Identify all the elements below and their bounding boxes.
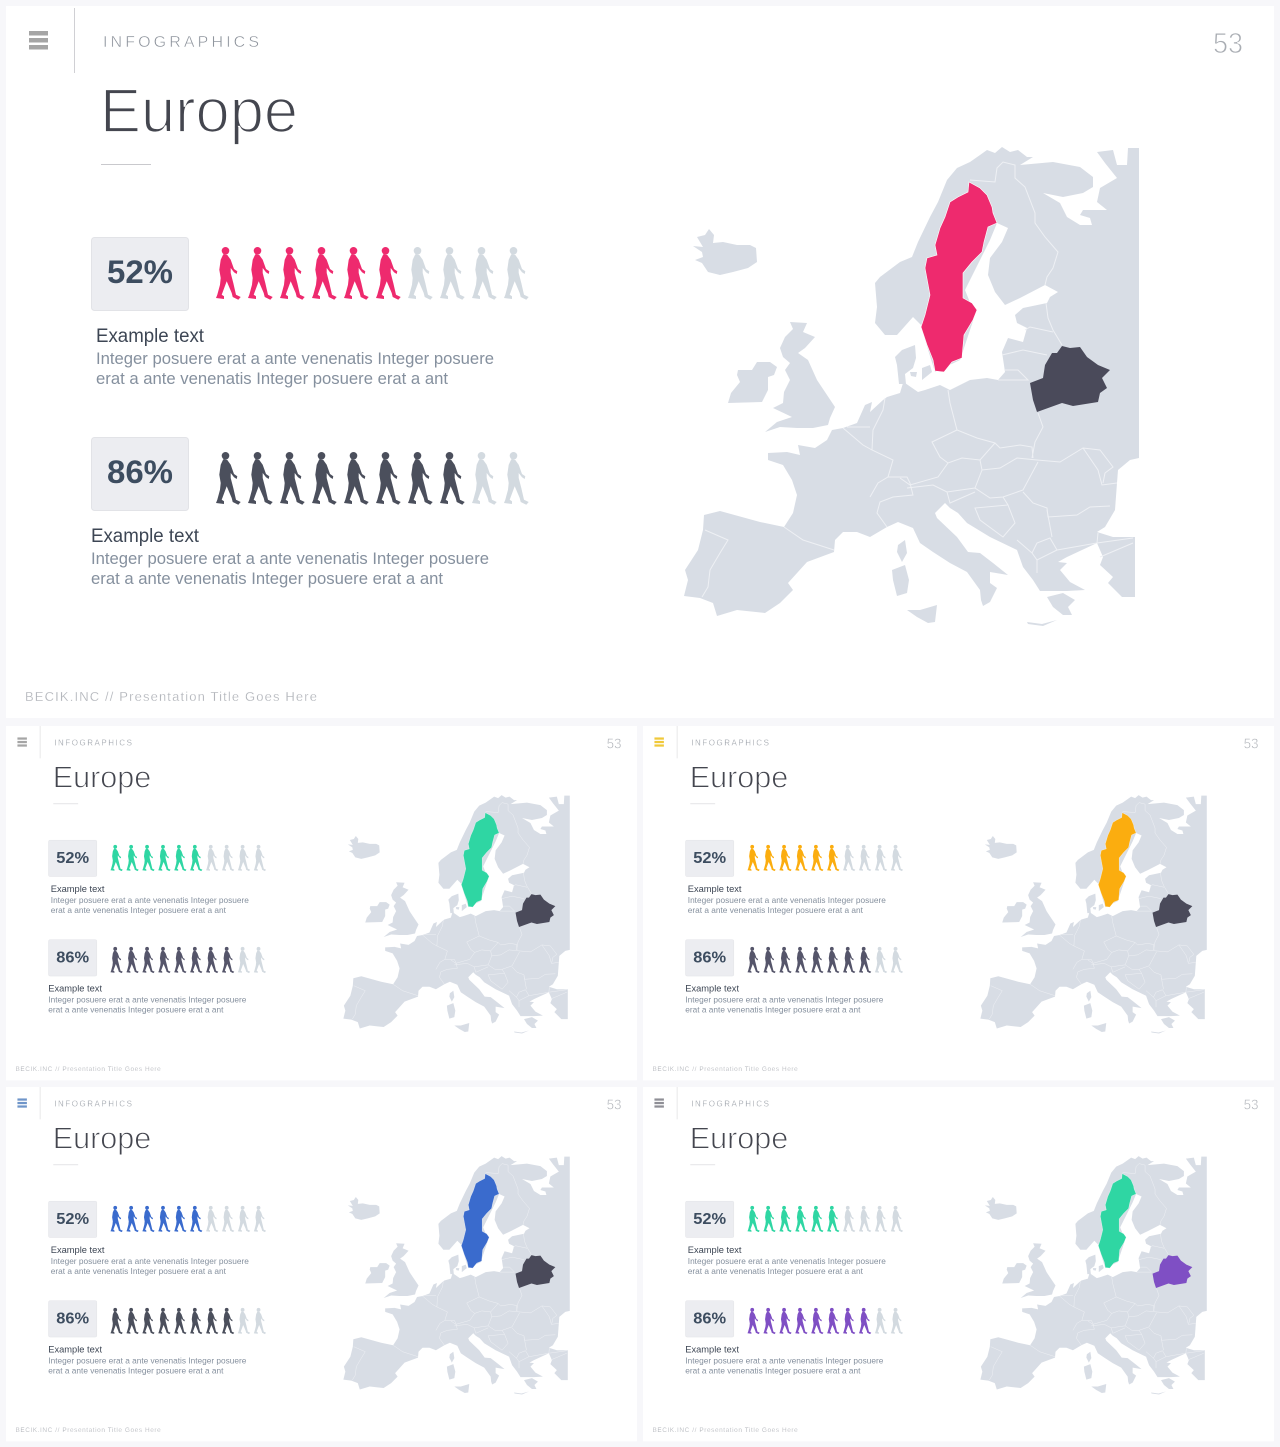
- title rule: [53, 1164, 78, 1166]
- stat: 86%: Example text: [91, 526, 200, 547]
- stat: 52%: 52%: [693, 1211, 726, 1228]
- stat: 52%: erat a ante venenatis Integer posuere erat a ant: [51, 905, 227, 915]
- stat: 86%: erat a ante venenatis Integer posuere erat a ant: [48, 1005, 224, 1015]
- stat: 86%: Integer posuere erat a ante venenatis Integer posuere: [685, 1356, 884, 1366]
- title rule: [101, 164, 151, 165]
- kicker: INFOGRAPHICS: [103, 34, 259, 51]
- footer: BECIK.INC // Presentation Title Goes Here: [652, 1066, 798, 1073]
- footer: BECIK.INC // Presentation Title Goes Here: [652, 1427, 798, 1434]
- stat: 52%: 52%: [693, 850, 726, 867]
- icon: menu: [654, 1098, 664, 1108]
- stat: 86%: Integer posuere erat a ante venenatis Integer posuere: [48, 1356, 247, 1366]
- stat: 86%: [48, 1301, 266, 1376]
- kicker: INFOGRAPHICS: [54, 1099, 132, 1108]
- stat: 52%: [686, 1201, 903, 1276]
- map of Europe: [980, 795, 1207, 1034]
- page number: 53: [1244, 1097, 1259, 1113]
- stat: 86%: 86%: [56, 949, 89, 966]
- title: Europe: [690, 1121, 788, 1156]
- stat: 86%: erat a ante venenatis Integer posuere erat a ant: [685, 1005, 861, 1015]
- stat: 52%: Example text: [51, 1245, 105, 1256]
- header divider: [39, 726, 41, 758]
- title: Europe: [53, 760, 151, 795]
- stat: 52%: Example text: [688, 1245, 742, 1256]
- stat: 52%: Integer posuere erat a ante venenatis Integer posuere: [688, 1256, 886, 1266]
- map of Europe: [343, 1156, 570, 1395]
- header divider: [39, 1087, 41, 1119]
- stat: 52%: Integer posuere erat a ante venenatis Integer posuere: [688, 895, 886, 905]
- stat: 86%: Integer posuere erat a ante venenatis Integer posuere: [91, 549, 489, 568]
- stat: 86%: [685, 1301, 903, 1376]
- page number: 53: [1213, 28, 1243, 60]
- stat: 86%: [48, 940, 266, 1015]
- stat: 86%: 86%: [693, 1310, 726, 1327]
- stat: 86%: erat a ante venenatis Integer posuere erat a ant: [685, 1366, 861, 1376]
- stat: 52%: erat a ante venenatis Integer posuere erat a ant: [688, 1266, 864, 1276]
- stat: 86%: Example text: [48, 984, 102, 995]
- stat: 86%: 86%: [107, 454, 173, 490]
- stat: 52%: 52%: [56, 850, 89, 867]
- title: Europe: [53, 1121, 151, 1156]
- stat: 52%: [49, 1201, 266, 1276]
- stat: 52%: Example text: [96, 326, 205, 347]
- page number: 53: [607, 736, 622, 752]
- footer: BECIK.INC // Presentation Title Goes Here: [25, 689, 317, 704]
- kicker: INFOGRAPHICS: [691, 1099, 769, 1108]
- stat: 52%: erat a ante venenatis Integer posuere erat a ant: [96, 369, 448, 388]
- icon: menu: [29, 31, 48, 50]
- stat: 86%: Example text: [685, 984, 739, 995]
- stat: 86%: Example text: [685, 1345, 739, 1356]
- panel: small slide green: [6, 726, 637, 1080]
- stat: 86%: 86%: [56, 1310, 89, 1327]
- stat: 52%: 52%: [56, 1211, 89, 1228]
- map of Europe: [980, 1156, 1207, 1395]
- icon: menu: [17, 737, 27, 747]
- stat: 86%: Integer posuere erat a ante venenatis Integer posuere: [685, 995, 884, 1005]
- stat: 86%: Example text: [48, 1345, 102, 1356]
- stat: 52%: [686, 840, 903, 915]
- stat: 86%: [685, 940, 903, 1015]
- panel: main slide: [6, 6, 1274, 718]
- map of Europe: [684, 147, 1139, 626]
- footer: BECIK.INC // Presentation Title Goes Here: [15, 1066, 161, 1073]
- page number: 53: [1244, 736, 1259, 752]
- stat: 52%: erat a ante venenatis Integer posuere erat a ant: [688, 905, 864, 915]
- stat: 86%: erat a ante venenatis Integer posuere erat a ant: [91, 569, 443, 588]
- stat: 86%: [91, 438, 529, 588]
- stat: 52%: Example text: [51, 884, 105, 895]
- header divider: [74, 8, 75, 73]
- stat: 52%: erat a ante venenatis Integer posuere erat a ant: [51, 1266, 227, 1276]
- stat: 86%: Integer posuere erat a ante venenatis Integer posuere: [48, 995, 247, 1005]
- stat: 52%: [49, 840, 266, 915]
- title rule: [690, 1164, 715, 1166]
- stat: 52%: Integer posuere erat a ante venenatis Integer posuere: [96, 349, 494, 368]
- panel: small slide orange: [643, 726, 1274, 1080]
- icon: menu: [17, 1098, 27, 1108]
- header divider: [676, 726, 678, 758]
- icon: menu: [654, 737, 664, 747]
- kicker: INFOGRAPHICS: [691, 738, 769, 747]
- title: Europe: [690, 760, 788, 795]
- stat: 52%: Integer posuere erat a ante venenatis Integer posuere: [51, 1256, 249, 1266]
- kicker: INFOGRAPHICS: [54, 738, 132, 747]
- stat: 52%: Integer posuere erat a ante venenatis Integer posuere: [51, 895, 249, 905]
- panel: small slide green and purple: [643, 1087, 1274, 1441]
- title rule: [690, 803, 715, 805]
- title rule: [53, 803, 78, 805]
- page number: 53: [607, 1097, 622, 1113]
- panel: small slide blue: [6, 1087, 637, 1441]
- stat: 86%: 86%: [693, 949, 726, 966]
- stat: 52%: Example text: [688, 884, 742, 895]
- footer: BECIK.INC // Presentation Title Goes Here: [15, 1427, 161, 1434]
- map of Europe: [343, 795, 570, 1034]
- stat: 52%: 52%: [107, 254, 173, 290]
- title: Europe: [100, 77, 298, 146]
- stat: 86%: erat a ante venenatis Integer posuere erat a ant: [48, 1366, 224, 1376]
- stat: 52%: [92, 238, 529, 388]
- header divider: [676, 1087, 678, 1119]
